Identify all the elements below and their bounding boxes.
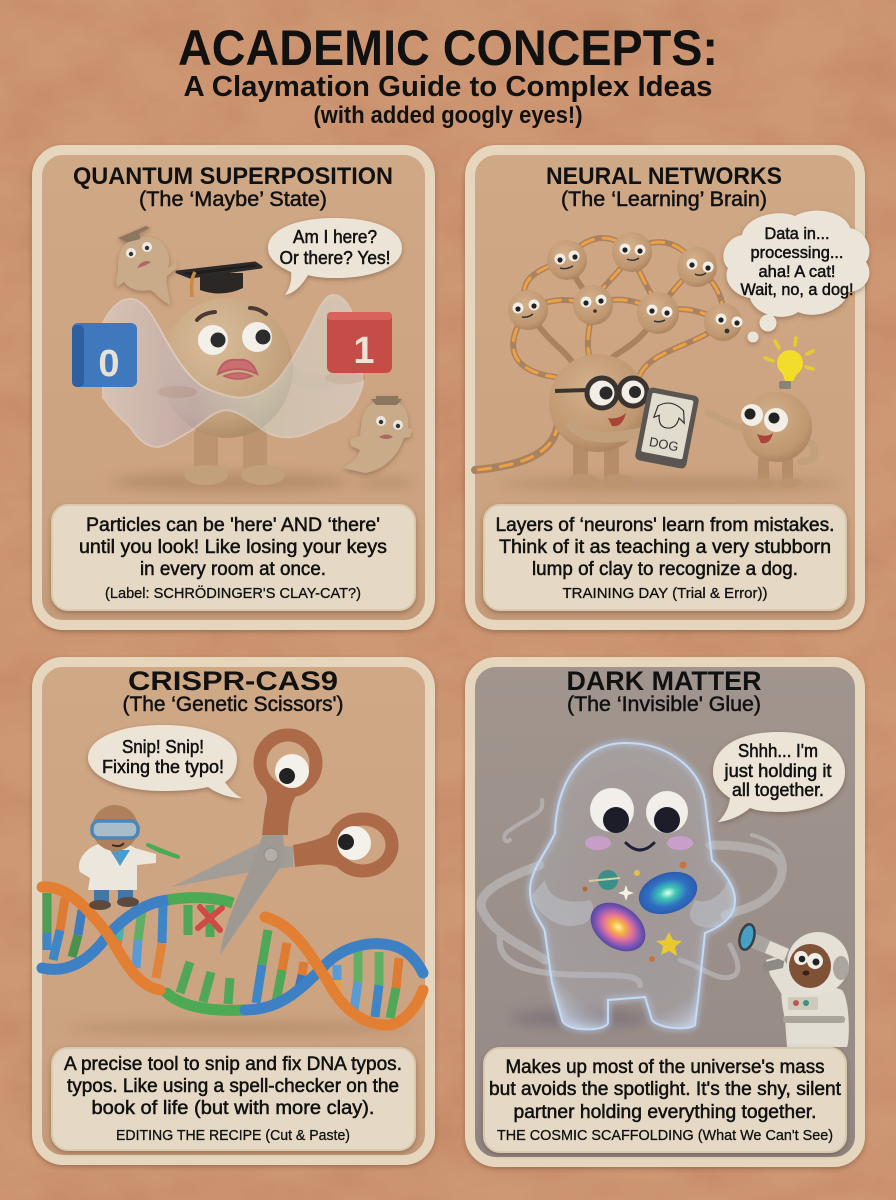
tablet showing dog: [634, 387, 700, 469]
speech bubble: [268, 218, 402, 295]
thought cloud: Data in...: [764, 224, 830, 243]
block: zero: [72, 323, 137, 387]
galaxies, planet, star: [581, 862, 703, 962]
caption plaque: but avoids the spotlight. It's the shy, silent: [489, 1079, 842, 1100]
tagline: (with added googly eyes!): [314, 102, 582, 129]
heading: QUANTUM SUPERPOSITION: [73, 163, 393, 190]
panel: crispr-cas9: [37, 662, 430, 1160]
title block: [178, 20, 718, 129]
character: pointing clay friend: [708, 392, 815, 488]
tablet showing dog: DOG: [648, 434, 680, 454]
caption plaque: Layers of ‘neurons' learn from mistakes.: [496, 515, 834, 536]
caption plaque: Particles can be 'here' AND ‘there': [86, 515, 380, 536]
wave function ribbon: [103, 295, 363, 447]
caption plaque: book of life (but with more clay).: [92, 1098, 374, 1119]
caption plaque: Think of it as teaching a very stubborn: [499, 537, 831, 558]
scissors with googly eyes: [172, 735, 392, 955]
main title: ACADEMIC CONCEPTS:: [178, 20, 718, 76]
heading: DARK MATTER: [566, 666, 762, 696]
neuron characters: [508, 232, 742, 341]
card frame: [470, 150, 860, 625]
panel: quantum superposition: [37, 150, 430, 625]
ghost character: lower: [343, 396, 412, 473]
caption plaque: THE COSMIC SCAFFOLDING (What We Can't See): [497, 1127, 833, 1144]
panel: dark matter: [470, 662, 860, 1162]
caption plaque: A precise tool to snip and fix DNA typos.: [64, 1054, 402, 1075]
caption plaque: Makes up most of the universe's mass: [506, 1057, 824, 1078]
caption plaque: until you look! Like losing your keys: [79, 537, 387, 558]
block: one: 1: [353, 330, 375, 372]
glowing neural connections: [475, 238, 723, 470]
subheading: (The ‘Maybe’ State): [139, 188, 327, 211]
caption plaque: EDITING THE RECIPE (Cut & Paste): [116, 1127, 350, 1144]
character: scientist with goggles: [79, 805, 178, 910]
card frame: [37, 662, 430, 1160]
DNA helix: [42, 887, 423, 1025]
thought cloud: [723, 211, 869, 342]
speech bubble: [713, 732, 845, 822]
speech bubble: [88, 725, 242, 798]
character: astronaut with telescope: [737, 923, 849, 1047]
character: clay student with glasses: [549, 354, 647, 488]
caption plaque: [52, 1048, 415, 1150]
speech bubble: Snip! Snip!: [122, 737, 204, 757]
caption plaque: TRAINING DAY (Trial & Error)): [562, 585, 768, 602]
speech bubble: Fixing the typo!: [102, 757, 224, 777]
caption plaque: in every room at once.: [140, 559, 326, 580]
speech bubble: Shhh... I'm: [738, 741, 818, 761]
character: translucent dark matter blob: [530, 743, 735, 1029]
thought cloud: Wait, no, a dog!: [740, 280, 854, 299]
caption plaque: [484, 1048, 846, 1152]
speech bubble: Am I here?: [293, 227, 377, 247]
subheading: (The ‘Learning’ Brain): [561, 188, 767, 211]
icon: red X mark: [198, 907, 222, 930]
speech bubble: just holding it: [723, 761, 832, 781]
subheading: (The ‘Invisible' Glue): [567, 693, 761, 716]
wisps: [481, 800, 785, 985]
caption plaque: typos. Like using a spell-checker on the: [67, 1076, 399, 1097]
subtitle: A Claymation Guide to Complex Ideas: [184, 71, 712, 103]
card frame: [37, 150, 430, 625]
subheading: (The ‘Genetic Scissors'): [122, 693, 344, 716]
block: zero: 0: [98, 343, 120, 385]
icon: light bulb: [765, 338, 813, 389]
caption plaque: [52, 505, 415, 610]
card frame: [470, 662, 860, 1162]
caption plaque: (Label: SCHRÖDINGER'S CLAY-CAT?): [105, 584, 361, 602]
block: one: [327, 312, 392, 373]
caption plaque: partner holding everything together.: [514, 1102, 816, 1123]
base pairs: [47, 893, 399, 1018]
speech bubble: Or there? Yes!: [280, 248, 390, 268]
caption plaque: [484, 505, 846, 610]
thought cloud: aha! A cat!: [758, 262, 836, 281]
caption plaque: lump of clay to recognize a dog.: [532, 559, 798, 580]
speech bubble: all together.: [732, 780, 824, 800]
panel: neural networks: [470, 150, 869, 625]
heading: NEURAL NETWORKS: [546, 163, 782, 190]
thought cloud: processing...: [750, 243, 844, 262]
ghost character: upper: [116, 226, 177, 305]
heading: CRISPR-CAS9: [128, 666, 338, 696]
character: main clay blob with graduation cap: [157, 263, 365, 485]
character face: [197, 308, 272, 379]
